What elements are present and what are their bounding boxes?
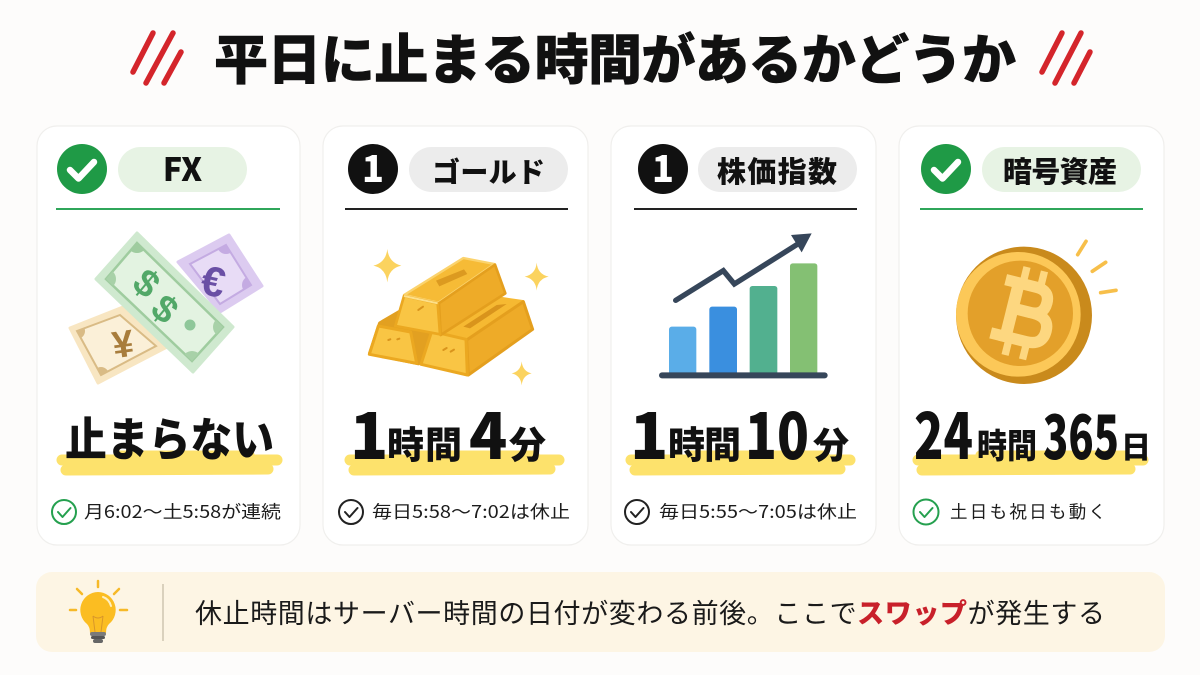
panel: FX (37, 126, 300, 545)
pill label: FX (118, 145, 247, 192)
icon: gold bars (369, 249, 549, 385)
highlight stroke (918, 455, 1143, 470)
icon: currency notes: ¥ (110, 323, 136, 367)
pill label: FX: FX (163, 145, 202, 191)
panel: 株価指数 (611, 126, 876, 545)
headline: 24時間365日: 365 (1043, 390, 1119, 477)
icon: green check badge (921, 144, 971, 194)
headline: 1時間10分: 1 (630, 387, 668, 478)
pill label: 暗号資産 (982, 147, 1141, 192)
headline: 1時間4分: 4 (469, 387, 507, 478)
chart: rising bars (659, 233, 828, 378)
title: 平日に止まる時間があるかどうか (214, 16, 1016, 95)
icon: bitcoin coin (956, 241, 1116, 384)
decorative red slashes left (133, 33, 181, 83)
headline: 24時間365日: 日 (1121, 423, 1151, 467)
callout text: 休止時間はサーバー時間の日付が変わる前後。ここでスワップが発生する (195, 592, 1105, 631)
note: index hours: 毎日5:55～7:05は休止 (659, 499, 857, 524)
pill label: 株価指数: 株価指数 (717, 149, 837, 191)
panel: 暗号資産 (899, 126, 1164, 545)
icon: currency notes: $ (143, 287, 186, 333)
decorative red slashes right (1042, 33, 1090, 83)
headline: 24時間365日: 時間 (977, 419, 1037, 468)
headline: 1時間4分: 1 (350, 387, 388, 478)
icon: number 1 badge (638, 141, 688, 194)
panel: ゴールド (323, 126, 588, 545)
callout: bottom note (36, 572, 1165, 652)
note: FX hours: 月6:02～土5:58が連続 (84, 499, 281, 524)
headline: 24時間365日 (914, 387, 1151, 478)
pill label: ゴールド: ゴールド (432, 151, 545, 191)
icon: currency notes: $ (124, 261, 168, 307)
icon: currency notes (69, 233, 262, 383)
pill label: ゴールド (409, 147, 568, 192)
headline: 1時間4分: 時間 (387, 415, 462, 469)
highlight stroke (62, 455, 277, 470)
headline: 1時間10分: 10 (745, 387, 809, 478)
icon: light bulb (70, 581, 127, 643)
note: crypto hours: 土日も祝日も動く (950, 499, 1106, 524)
icon: green check badge (57, 144, 107, 194)
headline: 1時間10分: 分 (813, 417, 849, 469)
icon: number 1 badge: 1 (652, 141, 674, 193)
icon: number 1 badge (348, 141, 398, 194)
headline: 止まらない: 止まらない (65, 404, 274, 470)
highlight stroke (631, 455, 850, 470)
icon: number 1 badge: 1 (362, 141, 384, 193)
highlight stroke (350, 455, 559, 470)
headline: 24時間365日: 24 (914, 387, 973, 478)
headline: 1時間10分: 時間 (668, 415, 741, 469)
note: gold hours: 毎日5:58～7:02は休止 (372, 499, 570, 524)
headline: 1時間4分: 分 (509, 415, 546, 469)
pill label: 暗号資産: 暗号資産 (1003, 149, 1117, 191)
icon: currency notes: € (197, 256, 230, 307)
headline: 1時間4分 (350, 387, 546, 478)
headline: 1時間10分 (630, 387, 849, 478)
